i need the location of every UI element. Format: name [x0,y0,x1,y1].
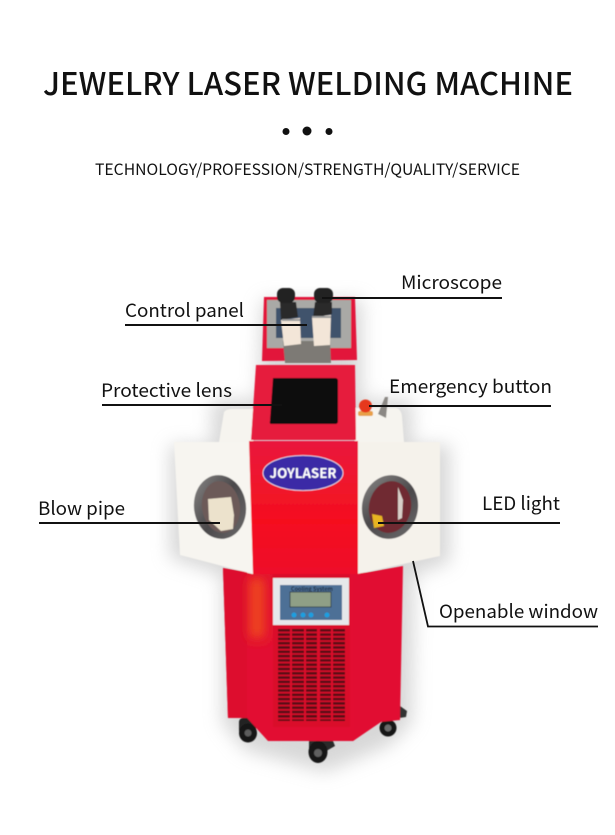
top panel [262,297,357,361]
cooling system panel [273,578,349,625]
cabinet left side panel [223,568,247,718]
left viewing port [190,472,250,542]
ventilation grill [278,629,345,721]
central red column [249,441,358,574]
cabinet left bevel glow [249,578,265,638]
callout: Control panel: Control panel [125,297,244,323]
caster wheels [239,706,407,763]
subtitle: TECHNOLOGY/PROFESSION/STRENGTH/QUALITY/SERVICE [95,158,520,180]
microscope [277,288,333,363]
brand oval: JOYLASER [270,462,336,482]
white shoulders [219,409,253,442]
centre caster [308,741,335,763]
right caster [380,706,407,736]
grill surround [273,574,350,727]
soft shadow [170,300,450,772]
title: JEWELRY LASER WELDING MACHINE [43,59,573,105]
emergency button [358,397,388,418]
decorative three dots [282,126,332,136]
brand oval [263,456,343,490]
right viewing port [357,471,423,543]
red head [251,365,356,440]
callout: Openable window: Openable window [439,598,598,624]
right white wing [357,442,440,574]
callout: Microscope: Microscope [401,269,502,295]
left caster [239,718,257,742]
callout: Openable window [413,561,598,626]
cabinet right side panel [352,571,381,741]
callout: Protective lens: Protective lens [101,377,232,403]
protective lens window [270,378,338,424]
callout: Blow pipe: Blow pipe [38,495,125,521]
callout: Emergency button: Emergency button [389,373,552,399]
callout: LED light: LED light [482,490,560,516]
cooling system panel: Cooling System [291,585,333,593]
lower cabinet [223,566,403,741]
left white wing [174,442,253,574]
machine illustration [170,288,450,772]
